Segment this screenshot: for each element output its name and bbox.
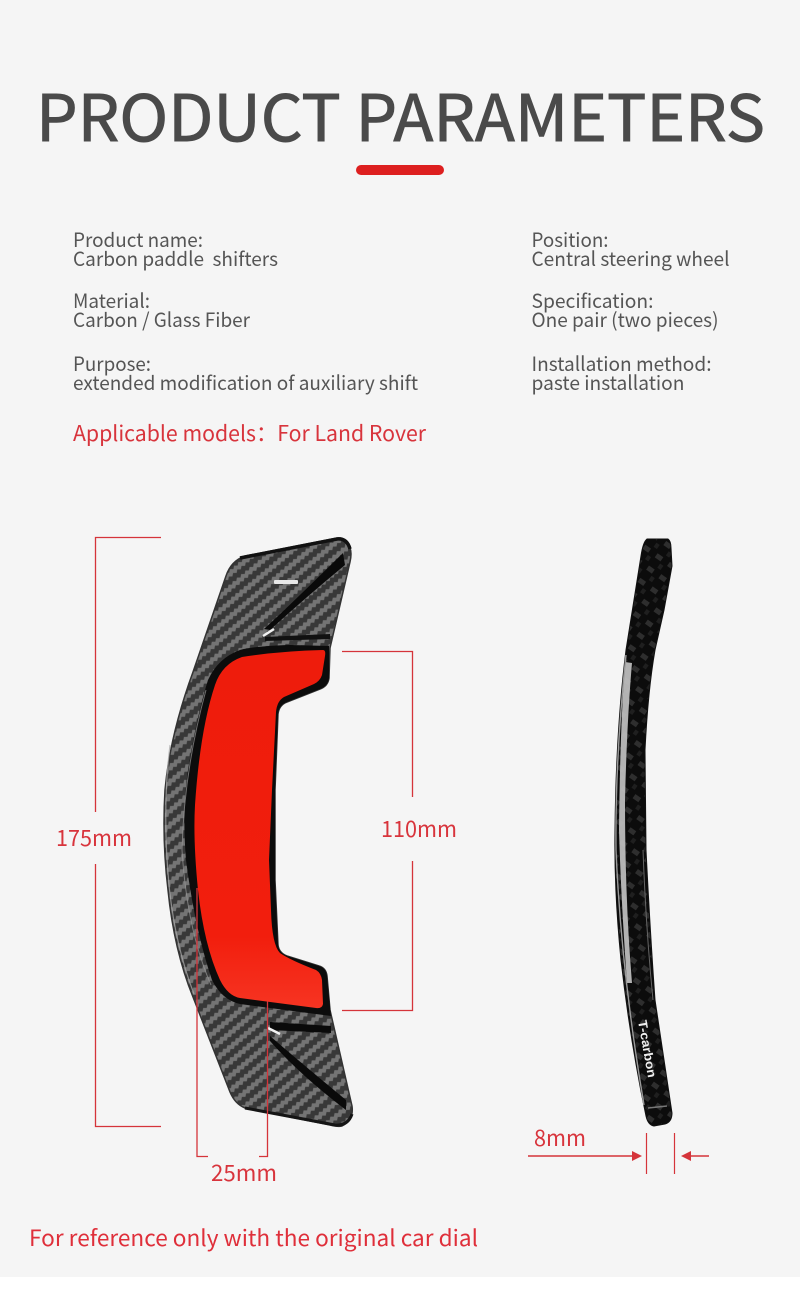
upper horizontal slot [265,634,330,641]
brand text: T-carbon [635,1019,659,1079]
paddle shifter front view [164,538,352,1126]
title: PRODUCT PARAMETERS [36,68,765,160]
applicable models note: Applicable models：For Land Rover [73,417,427,448]
text block: product specifications right column: paste installation [532,367,684,396]
text block: product specifications right column: Central steering wheel [532,243,730,272]
paddle inner black border [184,645,331,1016]
text block: product specifications left column: Purpose: [73,348,151,377]
text block: product specifications left column [73,224,419,396]
silver edge strip [619,662,632,983]
text block: product specifications right column [532,224,730,396]
upper slot highlight [263,629,274,636]
lower slot highlight [268,1028,280,1034]
text block: product specifications left column: Product name: [73,224,203,253]
text block: product specifications left column: Carbon / Glass Fiber [73,304,250,333]
outer edge highlight [616,655,644,1105]
lower horizontal slot [270,1022,331,1033]
text block: product specifications right column: One pair (two pieces) [532,304,718,333]
text block: product specifications left column: Material: [73,285,150,314]
upper diagonal slot [264,553,345,630]
dimension: 175mm height [56,538,161,1126]
dimension: 25mm width [197,888,277,1188]
text block: product specifications right column: Specification: [532,285,654,314]
text block: product specifications right column: Installation method: [532,348,712,377]
dimension: 8mm thickness: 8mm [534,1121,586,1153]
title underline accent [356,165,444,175]
silver edge highlight [166,745,194,994]
inner edge highlight [643,850,653,1000]
upper shift marker dash [274,580,298,584]
text block: product specifications left column: Carbon paddle shifters [73,243,278,272]
dimension: 110mm inner height: 110mm [381,812,457,844]
text block: product specifications right column: Position: [532,224,608,253]
inner silver edge highlight [182,690,211,985]
text block: product specifications left column: extended modification of auxiliary shift [73,367,419,396]
dimension: 175mm height: 175mm [56,821,132,853]
side profile body [615,539,672,1126]
dimension: 25mm width: 25mm [211,1156,277,1188]
bottom tip highlight [648,1106,667,1108]
dimension: 8mm thickness [528,1121,709,1174]
footer note: For reference only with the original car dial [29,1221,478,1253]
dimension: 110mm inner height [342,652,457,1010]
lower diagonal slot [270,1036,346,1110]
paddle top edge [240,539,350,558]
paddle carbon body [164,538,352,1126]
paddle shifter side view [615,539,672,1126]
red adhesive pad [194,650,325,1008]
paddle bottom edge [245,1108,352,1125]
